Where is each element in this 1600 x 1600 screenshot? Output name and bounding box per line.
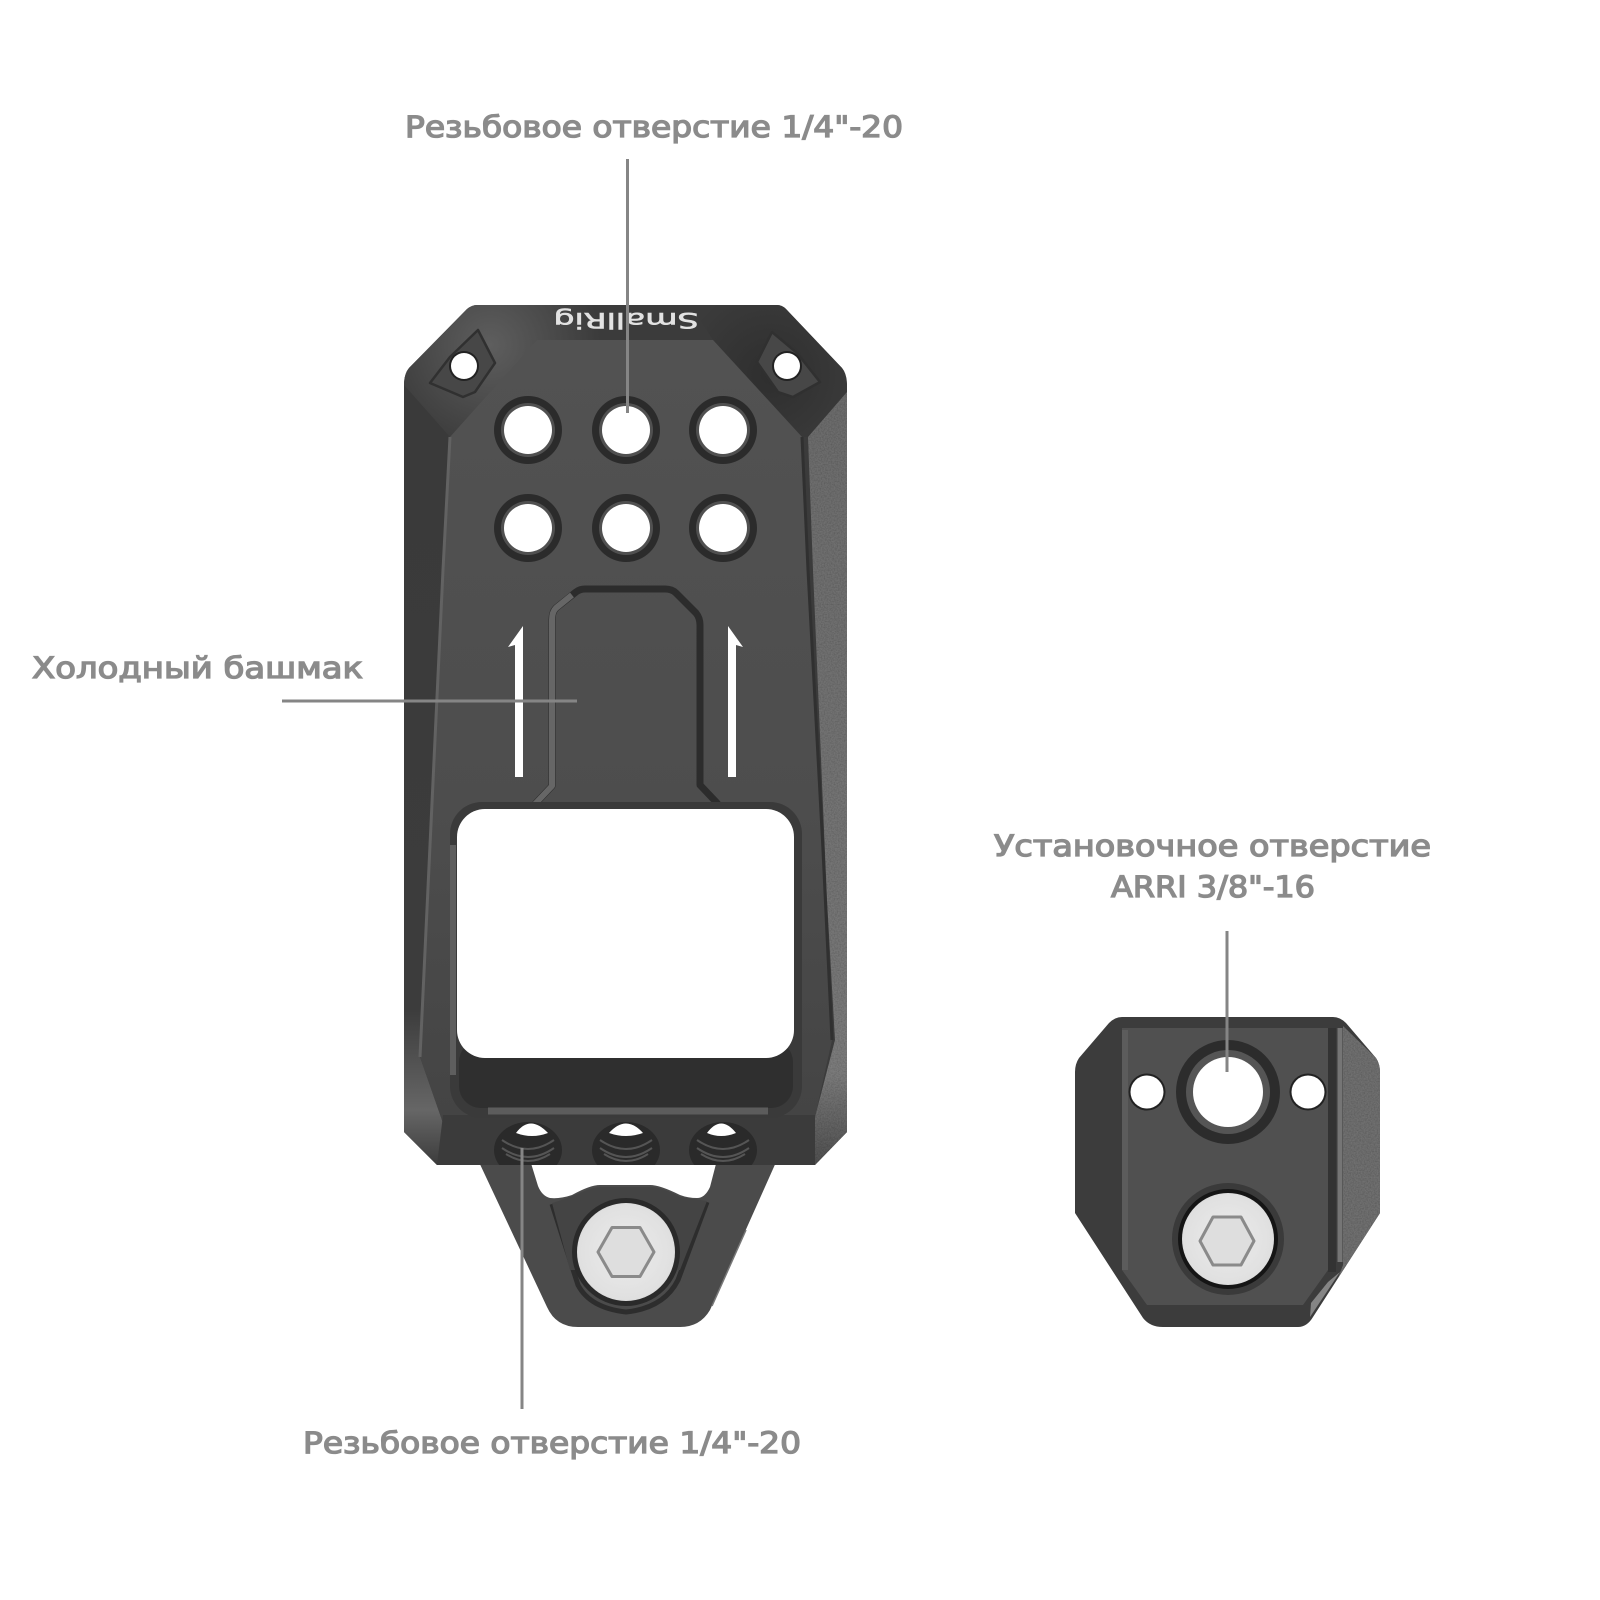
plate main panel <box>420 340 832 1123</box>
cold shoe recess <box>535 589 718 804</box>
callout: ARRI mounting hole: Установочное отверстие <box>994 829 1431 863</box>
large mounting plate <box>404 305 847 1327</box>
left locating hole <box>1128 1074 1166 1110</box>
callout: ARRI mounting hole <box>994 829 1431 1072</box>
window cutout <box>457 809 794 1058</box>
plate top right chamfer <box>690 305 847 437</box>
bottom threaded holes <box>494 1122 757 1165</box>
small plate corner highlight <box>1310 1272 1340 1317</box>
window recess <box>450 802 802 1118</box>
left screw insert <box>430 330 495 397</box>
plate silhouette <box>404 305 847 1165</box>
left direction arrow <box>508 626 523 777</box>
threaded holes, top row <box>494 396 757 464</box>
hex bolt <box>572 1198 680 1306</box>
plate top left chamfer <box>404 305 640 437</box>
triangular bracket below plate <box>478 1160 777 1327</box>
small mounting plate <box>1075 1017 1380 1327</box>
callout: bottom threaded hole: Резьбовое отверстие 1/4"-20 <box>303 1426 801 1460</box>
logo: SmallRig <box>554 308 698 332</box>
callout: top threaded hole: Резьбовое отверстие 1/4"-20 <box>405 110 903 144</box>
small plate silhouette <box>1075 1017 1380 1327</box>
right screw insert <box>757 332 820 397</box>
right locating hole <box>1290 1074 1326 1110</box>
callout: cold shoe: Холодный башмак <box>32 651 363 685</box>
plate right facet <box>808 392 847 1165</box>
ARRI mounting hole <box>1176 1040 1280 1144</box>
threaded holes, second row <box>494 494 757 562</box>
callout: ARRI mounting hole: ARRI 3/8"-16 <box>1111 870 1315 904</box>
small plate right facet <box>1338 1026 1380 1278</box>
small plate main panel <box>1122 1028 1328 1305</box>
small plate hex bolt <box>1172 1183 1284 1295</box>
plate left facet <box>404 385 450 1165</box>
plate bottom band <box>437 1115 815 1165</box>
right direction arrow <box>728 626 743 777</box>
